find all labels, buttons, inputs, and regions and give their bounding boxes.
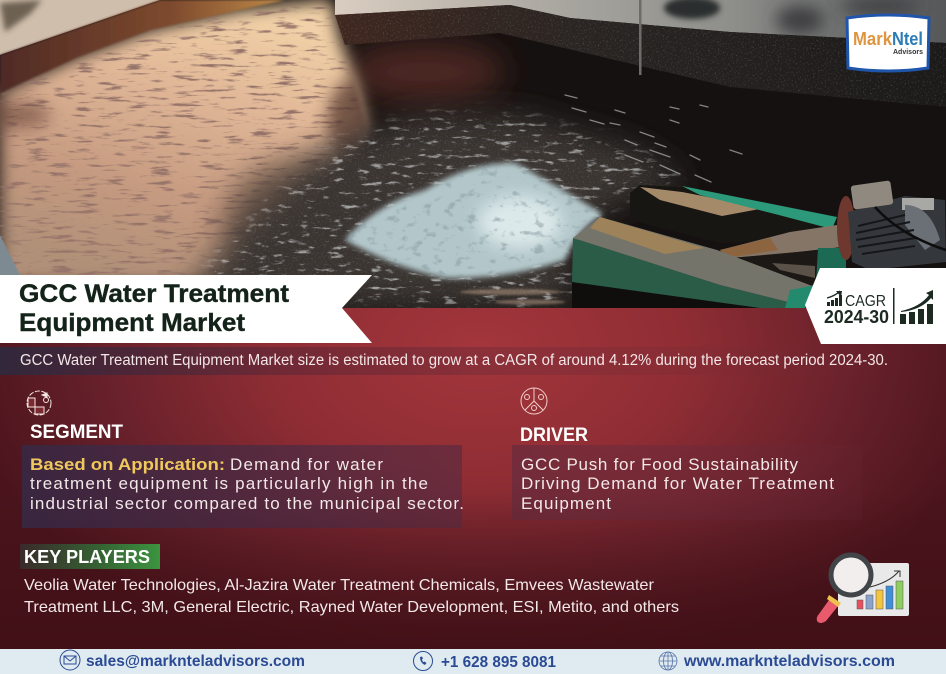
tan swirls below foam xyxy=(460,289,565,304)
segment text: Demand for water xyxy=(230,455,383,474)
top-left concrete wedge xyxy=(0,0,160,55)
contact: website: www.marknteladvisors.com xyxy=(683,653,895,670)
rusty pipe xyxy=(720,225,839,278)
heading: DRIVER xyxy=(520,425,588,446)
title: Equipment Market xyxy=(19,309,246,337)
top-right concrete wall xyxy=(335,0,946,110)
footer bar xyxy=(0,649,946,674)
icon: segment globe xyxy=(27,391,51,415)
front green beam xyxy=(572,217,815,308)
photo: water treatment outflow xyxy=(0,0,946,308)
lower-left grey bank xyxy=(0,235,20,275)
segment text xyxy=(30,455,464,513)
bright ripple dashes xyxy=(565,95,742,182)
CAGR badge: CAGR xyxy=(845,293,886,310)
players list: Veolia Water Technologies, Al-Jazira Water Treatment Chemicals, Emvees Wastewater xyxy=(24,577,655,594)
logo: MarkNtel Advisors: Ntel xyxy=(892,29,923,49)
logo: MarkNtel Advisors: Mark xyxy=(853,29,893,49)
icon: driver people circle xyxy=(521,388,547,414)
contact: phone xyxy=(414,652,556,671)
driver text: Equipment xyxy=(521,494,611,513)
players list xyxy=(24,577,679,616)
icon: large growth bars xyxy=(900,290,933,324)
driver text xyxy=(521,455,834,513)
segment text: Based on Application: xyxy=(30,455,225,474)
panel: key players xyxy=(20,544,679,616)
logo: MarkNtel Advisors: Advisors xyxy=(893,47,923,56)
brown shadow band xyxy=(0,0,285,93)
maroon background xyxy=(0,300,946,650)
intro text: GCC Water Treatment Equipment Market size is estimated to grow at a CAGR of around 4.12% during the forecast period 2024-30. xyxy=(20,352,888,369)
players list: Treatment LLC, 3M, General Electric, Rayned Water Development, ESI, Metito, and others xyxy=(24,599,679,616)
contact: email: sales@marknteladvisors.com xyxy=(86,653,305,670)
driver text: GCC Push for Food Sustainability xyxy=(521,455,798,474)
CAGR badge: 2024-30 xyxy=(824,307,889,327)
heading: KEY PLAYERS xyxy=(24,547,150,567)
heading: SEGMENT xyxy=(30,422,123,443)
segment text: treatment equipment is particularly high in the xyxy=(30,474,428,493)
icon: magnifier over chart xyxy=(817,555,909,623)
churned grey water xyxy=(190,100,710,308)
sunlit reflection xyxy=(0,0,368,285)
title xyxy=(19,280,290,337)
logo: MarkNtel Advisors xyxy=(847,15,929,71)
reflection ripples xyxy=(0,1,366,275)
intro text xyxy=(0,347,920,375)
back green beam xyxy=(630,185,837,227)
driver text: Driving Demand for Water Treatment xyxy=(521,474,834,493)
panel: segment xyxy=(22,391,464,528)
CAGR badge xyxy=(805,268,946,344)
segment text: industrial sector compared to the municipal sector. xyxy=(30,494,464,513)
icon: small bars xyxy=(827,291,842,306)
foam outflow xyxy=(335,155,610,285)
contact: phone: +1 628 895 8081 xyxy=(441,654,556,671)
pump motor xyxy=(816,180,946,278)
title: GCC Water Treatment xyxy=(19,280,290,308)
title ribbon xyxy=(0,275,372,343)
red glow on dark water xyxy=(345,42,505,102)
panel: driver xyxy=(512,388,862,520)
